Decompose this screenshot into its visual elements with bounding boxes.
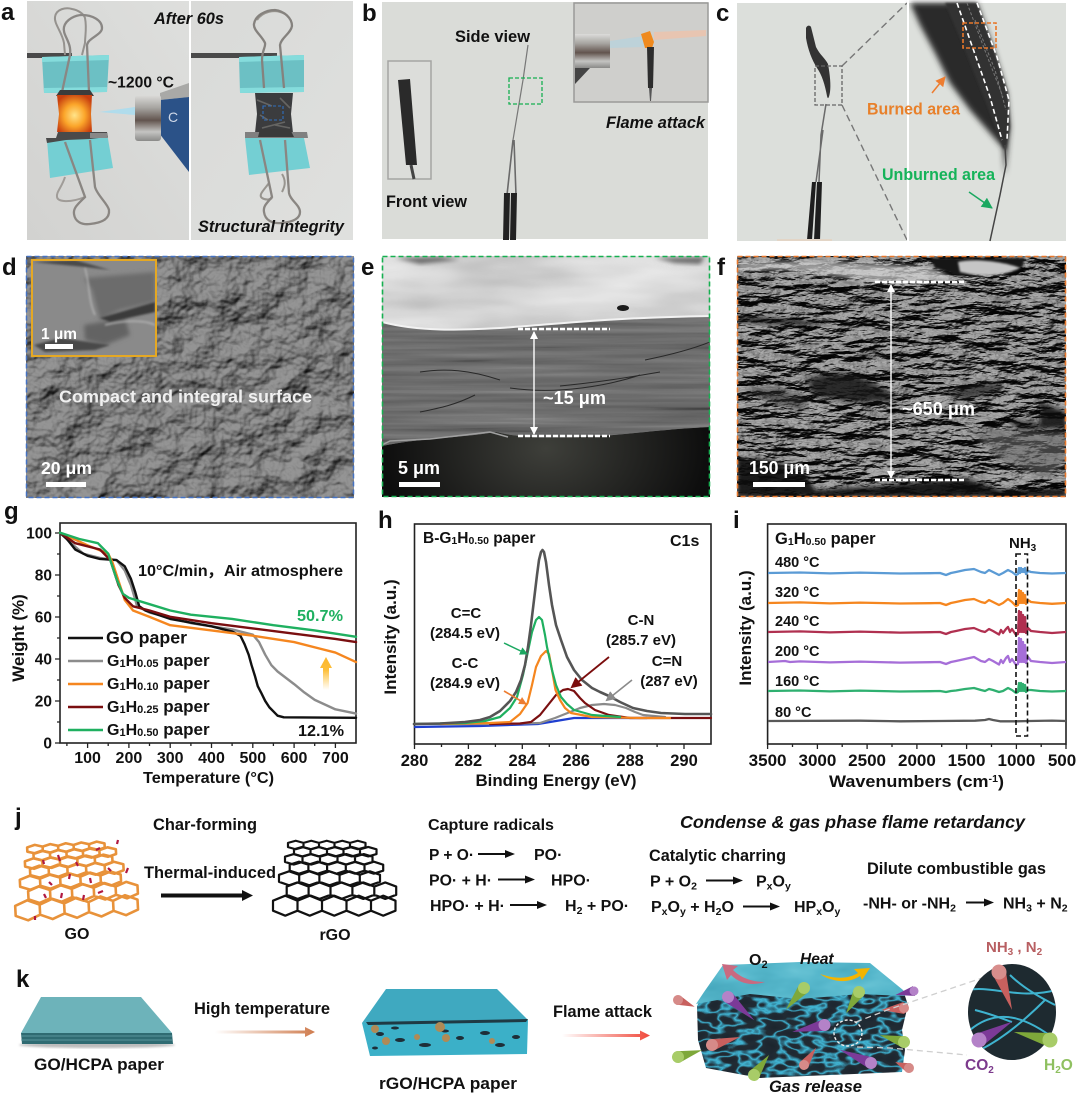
- XPS curves: [414, 550, 711, 727]
- x axis ticks: 3500: [749, 751, 787, 770]
- temperature labels: 160 °C: [775, 674, 820, 690]
- legend: paper: [159, 720, 210, 739]
- x axis title: ): [998, 772, 1004, 791]
- label H2O: O: [1061, 1057, 1073, 1074]
- caption high temperature: High temperature: [194, 1000, 330, 1018]
- capture radicals group: [428, 817, 629, 917]
- sample title: paper: [826, 530, 876, 548]
- spectrum 200 C: [768, 638, 1066, 665]
- sample title: H: [457, 530, 468, 547]
- x axis ticks: 282: [455, 752, 482, 770]
- legend: G: [107, 653, 119, 670]
- clip assembly after burning: [239, 10, 310, 223]
- spectrum 480 C: [768, 568, 1066, 575]
- reaction PxOy + H2O: O: [668, 899, 680, 916]
- temperature labels: [775, 555, 820, 721]
- rod: [27, 53, 277, 58]
- panel h: XPS chart: [378, 507, 711, 790]
- divider: [189, 0, 191, 240]
- bottom dark: [737, 458, 1066, 497]
- orange dashed box: [963, 23, 996, 48]
- label CO2: 2: [988, 1065, 994, 1076]
- panel label e: e: [361, 254, 374, 281]
- panel g: TGA chart: [4, 498, 356, 787]
- legend: G: [107, 676, 119, 693]
- panel label h: h: [378, 507, 393, 534]
- spectrum 160 C: [768, 683, 1066, 693]
- label C-N: (285.7 eV): [606, 632, 676, 649]
- panel label f: f: [717, 254, 726, 281]
- reaction 3: H: [565, 898, 577, 915]
- C1s label: C1s: [670, 533, 699, 550]
- panel label j: j: [14, 804, 22, 831]
- catalytic charring group: [649, 846, 841, 918]
- axes: [768, 524, 1066, 749]
- grey dashed box: [815, 66, 842, 105]
- zoom circle: [834, 1020, 862, 1046]
- reaction 3: + PO·: [582, 898, 629, 915]
- label H2O: 2: [1055, 1065, 1061, 1076]
- caption rGO/HCPA: rGO/HCPA paper: [379, 1074, 517, 1093]
- x axis ticks: 3000: [798, 751, 836, 770]
- reaction PxOy + H2O: x: [662, 906, 668, 918]
- caption: front view: Front view: [386, 193, 467, 211]
- reaction 1: PO·: [534, 847, 562, 864]
- reaction P + O2: P + O: [650, 874, 691, 890]
- arrow to C=C: [504, 643, 527, 654]
- reaction PxOy + H2O: y: [680, 906, 686, 918]
- legend: 0.05: [137, 658, 159, 670]
- label C=C: [430, 605, 500, 642]
- axes: [55, 523, 356, 748]
- tweezers: [507, 140, 516, 195]
- caption: structural integrity: Structural integrity: [198, 218, 345, 236]
- legend: 1: [119, 681, 126, 693]
- thickness marker: [518, 329, 610, 436]
- hand: [777, 239, 832, 241]
- zoomed burned area: [910, 3, 1010, 241]
- caption rGO: rGO: [319, 927, 351, 944]
- heading dilute: Dilute combustible gas: [867, 860, 1046, 878]
- label C-C: C-C: [452, 655, 478, 672]
- legend: 0.50: [137, 727, 159, 739]
- sample tip and tweezer strands: [816, 104, 826, 182]
- x axis ticks: 288: [616, 752, 644, 770]
- reaction PxOy + H2O: O: [822, 899, 835, 916]
- panel b: sample photo: [362, 0, 708, 240]
- photo right background: [909, 3, 1066, 241]
- reaction 2: HPO·: [551, 872, 591, 890]
- increase arrow: [320, 657, 332, 690]
- reaction PxOy + H2O: [651, 899, 841, 918]
- x axis ticks: 100: [74, 750, 101, 767]
- spectrum 80 C: [768, 719, 1066, 721]
- torch nozzle: C: [168, 109, 178, 125]
- photo background right: [191, 1, 353, 240]
- reaction 3: [430, 898, 629, 917]
- x axis ticks: 300: [157, 750, 184, 767]
- legend: [68, 628, 210, 739]
- burned sample overall: [806, 26, 830, 98]
- tweezers grip: [807, 182, 822, 240]
- x axis ticks: 284: [509, 752, 537, 770]
- GO/HCPA paper block: [19, 997, 175, 1048]
- main arrow: [161, 890, 253, 901]
- reaction P + O2: P: [756, 874, 767, 890]
- sample title: 0.50: [806, 536, 826, 548]
- scale bar e: 5 μm: [398, 458, 440, 478]
- scale bar f: 150 μm: [749, 458, 810, 478]
- reaction 2: [429, 872, 591, 890]
- x axis title: -1: [989, 774, 998, 785]
- caption: temperature: ~1200 °C: [108, 74, 174, 92]
- NH3 label: 3: [1031, 543, 1037, 554]
- curve GO: [60, 533, 356, 718]
- front-view inset: [388, 61, 431, 179]
- flame inset: [574, 3, 708, 102]
- x axis ticks: 290: [670, 752, 698, 770]
- legend: paper: [159, 674, 210, 693]
- heading capture radicals: Capture radicals: [428, 817, 554, 834]
- temperature labels: 480 °C: [775, 555, 820, 571]
- y axis ticks: 80: [35, 568, 52, 584]
- caption O2: 2: [761, 959, 768, 971]
- arrow unburned: [969, 192, 992, 208]
- legend: H: [126, 699, 137, 716]
- reaction PxOy + H2O: + H: [686, 899, 716, 916]
- panel j: mechanism: [12, 804, 1068, 944]
- NH3 label: NH: [1009, 535, 1031, 552]
- y axis ticks: [26, 526, 52, 752]
- scale bar f: [749, 458, 810, 487]
- legend: paper: [159, 697, 210, 716]
- label NH3, N2: NH: [986, 939, 1008, 956]
- y axis ticks: 0: [43, 736, 52, 752]
- x axis ticks: 280: [401, 752, 428, 770]
- label C=C: (284.5 eV): [430, 625, 500, 642]
- panel e: SEM cross-section: [361, 254, 710, 497]
- label C=N: [640, 653, 698, 690]
- caption flame attack: Flame attack: [553, 1003, 653, 1021]
- label H2O: H: [1044, 1057, 1055, 1074]
- smooth plate area: [970, 430, 1066, 478]
- x axis title: Wavenumbers (cm: [829, 772, 980, 791]
- image: [737, 256, 1066, 497]
- sample title: 1: [788, 536, 794, 548]
- legend: 1: [119, 727, 126, 739]
- reaction 1: P + O·: [429, 847, 474, 864]
- axes: [414, 524, 711, 749]
- orange dashed frame: [738, 256, 1066, 496]
- arrow to C-N: [572, 657, 609, 687]
- curve G1H0.50: [60, 533, 356, 637]
- caption: side view: Side view: [455, 28, 530, 46]
- legend: GO paper: [106, 628, 187, 648]
- x axis ticks: 286: [562, 752, 590, 770]
- reaction 1: [429, 847, 562, 864]
- reaction PxOy + H2O: x: [816, 906, 822, 918]
- reaction NH: [863, 896, 1068, 914]
- panel f: SEM foam cross-section: [717, 254, 1066, 497]
- caption: 15 um: ~15 μm: [543, 388, 606, 408]
- panel d: SEM surface: [2, 254, 354, 498]
- x axis ticks: [74, 750, 349, 767]
- clip assembly under flame: [42, 8, 113, 224]
- y axis ticks: 40: [35, 652, 52, 668]
- curve G1H0.10: [60, 533, 356, 662]
- x axis ticks: [401, 752, 698, 770]
- reaction PxOy + H2O: P: [651, 899, 662, 916]
- panel label g: g: [4, 498, 19, 525]
- annotation: rate: 10°C/min，Air atmosphere: [138, 563, 343, 580]
- x axis title: Binding Energy (eV): [476, 771, 636, 790]
- panel label k: k: [16, 966, 30, 993]
- y axis ticks: 20: [35, 694, 52, 710]
- temperature labels: 320 °C: [775, 585, 820, 601]
- x axis ticks: [749, 751, 1076, 770]
- divider: [907, 0, 909, 241]
- curve baseline: [415, 718, 647, 727]
- panel i: FTIR chart: [733, 507, 1076, 791]
- panel c: burned sample photo: [716, 0, 1066, 241]
- foam block: [695, 960, 910, 1080]
- NH3 dashed box: [1016, 554, 1028, 736]
- tweezers grip: [503, 193, 517, 240]
- curve C=C: [414, 617, 620, 724]
- caption heat: Heat: [800, 951, 834, 968]
- sample title: G: [775, 530, 788, 548]
- sample title: 0.50: [468, 535, 489, 547]
- x axis ticks: 500: [1048, 751, 1076, 770]
- caption thermal induced: Thermal-induced: [144, 863, 276, 882]
- inset scale: 1 μm: [41, 326, 77, 343]
- arrow burned: [932, 77, 945, 93]
- curve G1H0.05: [60, 533, 356, 714]
- dark layer gaps: [737, 315, 836, 326]
- spectra: [768, 568, 1066, 721]
- y axis title: Intensity (a.u.): [736, 570, 755, 686]
- scale bar d: 20 μm: [41, 458, 92, 478]
- side-view sample: [513, 45, 528, 140]
- rGO/HCPA block: [362, 989, 528, 1056]
- panel a: flame test photos: [1, 0, 353, 240]
- zoomed circular inset: [966, 962, 1059, 1062]
- photo background: [382, 2, 708, 239]
- sample title: H: [794, 530, 806, 548]
- rGO lattice: [273, 841, 396, 916]
- reaction P + O2: x: [767, 880, 773, 892]
- legend: G: [107, 699, 119, 716]
- GO lattice: [12, 840, 139, 921]
- label C=C: C=C: [451, 605, 481, 622]
- green dashed box: [509, 78, 542, 104]
- label NH3, N2: , N: [1013, 939, 1037, 956]
- annotation: 12.1%: 12.1%: [298, 723, 344, 740]
- sample title: B-G: [423, 530, 451, 547]
- caption: unburned area: Unburned area: [882, 166, 996, 184]
- curve C=N: [415, 704, 665, 724]
- TGA curves: [60, 533, 356, 718]
- heading condense and gas phase: Condense & gas phase flame retardancy: [680, 812, 1026, 832]
- x axis ticks: 400: [198, 750, 225, 767]
- panel label d: d: [2, 254, 17, 281]
- reaction 2: PO· + H·: [429, 872, 492, 890]
- curve C-C: [440, 651, 670, 724]
- top bright band: [737, 262, 955, 282]
- label NH3, N2: 2: [1037, 947, 1043, 958]
- x axis ticks: 700: [322, 750, 349, 767]
- label NH3, N2: 3: [1008, 947, 1014, 958]
- legend: 1: [119, 658, 126, 670]
- zoom guide lines: [842, 3, 907, 240]
- GO oxygen groups: [35, 840, 128, 920]
- reaction PxOy + H2O: 2: [716, 906, 722, 918]
- reaction P + O2: O: [773, 874, 785, 890]
- reaction 3: HPO· + H·: [430, 898, 505, 915]
- label CO2: CO: [965, 1057, 988, 1074]
- reaction PxOy + H2O: HP: [794, 899, 816, 916]
- photo left background: [737, 3, 907, 241]
- reaction NH: NH: [1003, 896, 1026, 912]
- y axis ticks: 100: [26, 526, 52, 542]
- caption O2: O: [749, 952, 761, 969]
- temperature labels: 80 °C: [775, 705, 812, 721]
- y axis ticks: 60: [35, 610, 52, 626]
- gas cones: [671, 980, 919, 1083]
- x axis ticks: 200: [116, 750, 142, 767]
- panel k: gas release schematic: [16, 939, 1073, 1094]
- green dashed frame: [382, 256, 710, 496]
- temperature labels: 200 °C: [775, 644, 820, 660]
- label C-C: (284.9 eV): [430, 675, 500, 692]
- arrow to C-C: [504, 691, 526, 704]
- reaction P + O2: y: [785, 880, 791, 892]
- x axis ticks: 2000: [898, 751, 936, 770]
- x axis ticks: 600: [281, 750, 308, 767]
- photo background left: [27, 1, 189, 240]
- thickness marker: [875, 282, 965, 480]
- reaction NH: -NH- or -NH: [863, 896, 950, 912]
- arrow to C=N: [607, 680, 632, 700]
- image: [382, 256, 710, 497]
- x axis title: Temperature (°C): [143, 770, 274, 787]
- reaction P + O2: [650, 874, 791, 892]
- scale bar e: [398, 458, 440, 487]
- annotation: 50.7%: 50.7%: [297, 608, 343, 625]
- legend: 0.10: [137, 681, 159, 693]
- dilute combustible gas group: [863, 860, 1068, 914]
- reaction NH: + N: [1032, 896, 1062, 912]
- panel label i: i: [733, 507, 740, 534]
- oxygen arrow: [722, 964, 765, 984]
- spectrum 240 C: [768, 611, 1066, 635]
- reaction 3: 2: [577, 905, 583, 917]
- arrow high temperature: [215, 1027, 315, 1037]
- x axis ticks: 1500: [948, 751, 986, 770]
- caption GO: GO: [65, 926, 89, 943]
- reaction PxOy + H2O: O: [721, 899, 734, 916]
- arrow flame attack: [562, 1030, 650, 1040]
- panel label b: b: [362, 0, 377, 27]
- caption char forming: Char-forming: [153, 816, 257, 834]
- legend: H: [126, 722, 137, 739]
- torch nozzle: [135, 83, 189, 172]
- curve envelope: [414, 550, 711, 724]
- reaction PxOy + H2O: y: [835, 906, 841, 918]
- scale bar d: [41, 458, 92, 487]
- label C-N: C-N: [628, 612, 654, 629]
- y axis title: Weight (%): [9, 594, 28, 682]
- x axis ticks: 2500: [848, 751, 886, 770]
- caption: flame attack: Flame attack: [606, 114, 706, 132]
- label C=N: C=N: [652, 653, 682, 670]
- legend: H: [126, 653, 137, 670]
- caption: surface: Compact and integral surface: [59, 386, 312, 406]
- inset SEM: [32, 260, 156, 356]
- label C-N: [606, 612, 676, 649]
- legend: paper: [159, 651, 210, 670]
- caption: 650 um: ~650 μm: [902, 399, 975, 419]
- reaction NH: 2: [1062, 902, 1068, 914]
- curve C-N: [490, 689, 711, 724]
- heading catalytic charring: Catalytic charring: [649, 846, 786, 865]
- heat arrow: [820, 968, 870, 981]
- sample title: 1: [451, 535, 457, 547]
- sample title: paper: [489, 530, 535, 547]
- label C-C: [430, 655, 500, 692]
- caption GO/HCPA: GO/HCPA paper: [34, 1055, 164, 1074]
- caption: after 60s: After 60s: [153, 9, 224, 28]
- flame: [99, 107, 135, 115]
- legend: 0.25: [137, 704, 159, 716]
- SEM image: [26, 256, 354, 498]
- reaction NH: 2: [950, 902, 956, 914]
- blue dashed frame: [26, 256, 354, 498]
- panel label c: c: [716, 0, 729, 27]
- x axis ticks: 500: [239, 750, 266, 767]
- x axis ticks: 1000: [997, 751, 1035, 770]
- legend: G: [107, 722, 119, 739]
- temperature labels: 240 °C: [775, 614, 820, 630]
- y axis title: Intensity (a.u.): [381, 579, 400, 695]
- label C=N: (287 eV): [640, 673, 698, 690]
- curve G1H0.25: [60, 533, 356, 642]
- reaction NH: 3: [1026, 902, 1032, 914]
- reaction P + O2: 2: [691, 880, 697, 892]
- zoom guide lines: [856, 977, 985, 1055]
- legend: H: [126, 676, 137, 693]
- caption: burned area: Burned area: [867, 100, 961, 118]
- legend: 1: [119, 704, 126, 716]
- spectrum 320 C: [768, 590, 1066, 606]
